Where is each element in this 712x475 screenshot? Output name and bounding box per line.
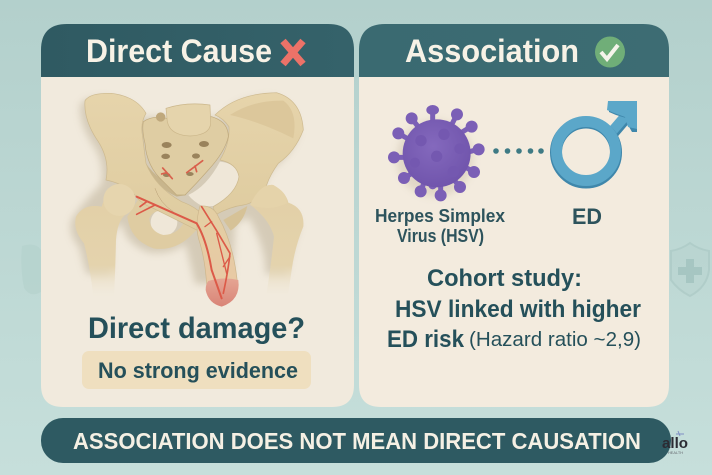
vertebra [166, 104, 211, 136]
text: cohort study [387, 265, 641, 353]
panel: direct cause [41, 24, 354, 407]
icon: faded shield [671, 243, 709, 296]
right femur [251, 185, 303, 293]
arteries [137, 188, 230, 298]
illustration: pelvis with arteries [71, 93, 303, 307]
panel header [41, 24, 354, 77]
icon: male symbol [556, 101, 637, 182]
pubic ring [127, 197, 200, 249]
right lower ramus [223, 206, 247, 231]
left ilium [85, 93, 208, 230]
heading: direct cause: Direct Cause [86, 33, 272, 69]
panel body [41, 70, 354, 407]
pelvic openings [188, 162, 239, 207]
sacral holes [161, 141, 209, 177]
shadow [71, 97, 299, 284]
banner: ASSOCIATION DOES NOT MEAN DIRECT CAUSATION [73, 428, 641, 454]
label: herpes simplex virus: Herpes Simplex [375, 206, 505, 226]
text: cohort study: ED risk [387, 326, 465, 353]
label: herpes simplex virus [375, 206, 505, 246]
panel header [359, 24, 669, 77]
sacrum [143, 117, 228, 195]
text: direct damage: Direct damage? [88, 312, 305, 345]
connector: dotted line [493, 148, 544, 154]
sacral backdrop shading [146, 163, 187, 197]
glans [206, 279, 239, 307]
icon: red cross [283, 41, 303, 64]
left femur [75, 186, 135, 297]
text: cohort study: (Hazard ratio ~2,9) [469, 329, 641, 351]
banner [41, 418, 671, 463]
label: herpes simplex virus: Virus (HSV) [397, 226, 484, 246]
text: cohort study: Cohort study: [427, 265, 582, 292]
icon: green check [595, 36, 625, 68]
icon: faded left emblem [21, 245, 41, 294]
panel: association [359, 24, 669, 407]
text: cohort study: HSV linked with higher [395, 296, 641, 323]
femoral heads [103, 184, 135, 216]
logo: allo health: allo [662, 435, 688, 452]
sacral arteries [162, 161, 203, 179]
shaft [197, 206, 237, 284]
panel body [359, 70, 669, 407]
badge: no strong evidence [82, 351, 311, 389]
right ilium [213, 93, 303, 215]
logo: allo health: HEALTH [668, 450, 683, 455]
icon: virus [388, 105, 485, 201]
label: ED: ED [572, 204, 602, 229]
heading: association: Association [405, 33, 579, 69]
badge: no strong evidence: No strong evidence [98, 358, 298, 383]
